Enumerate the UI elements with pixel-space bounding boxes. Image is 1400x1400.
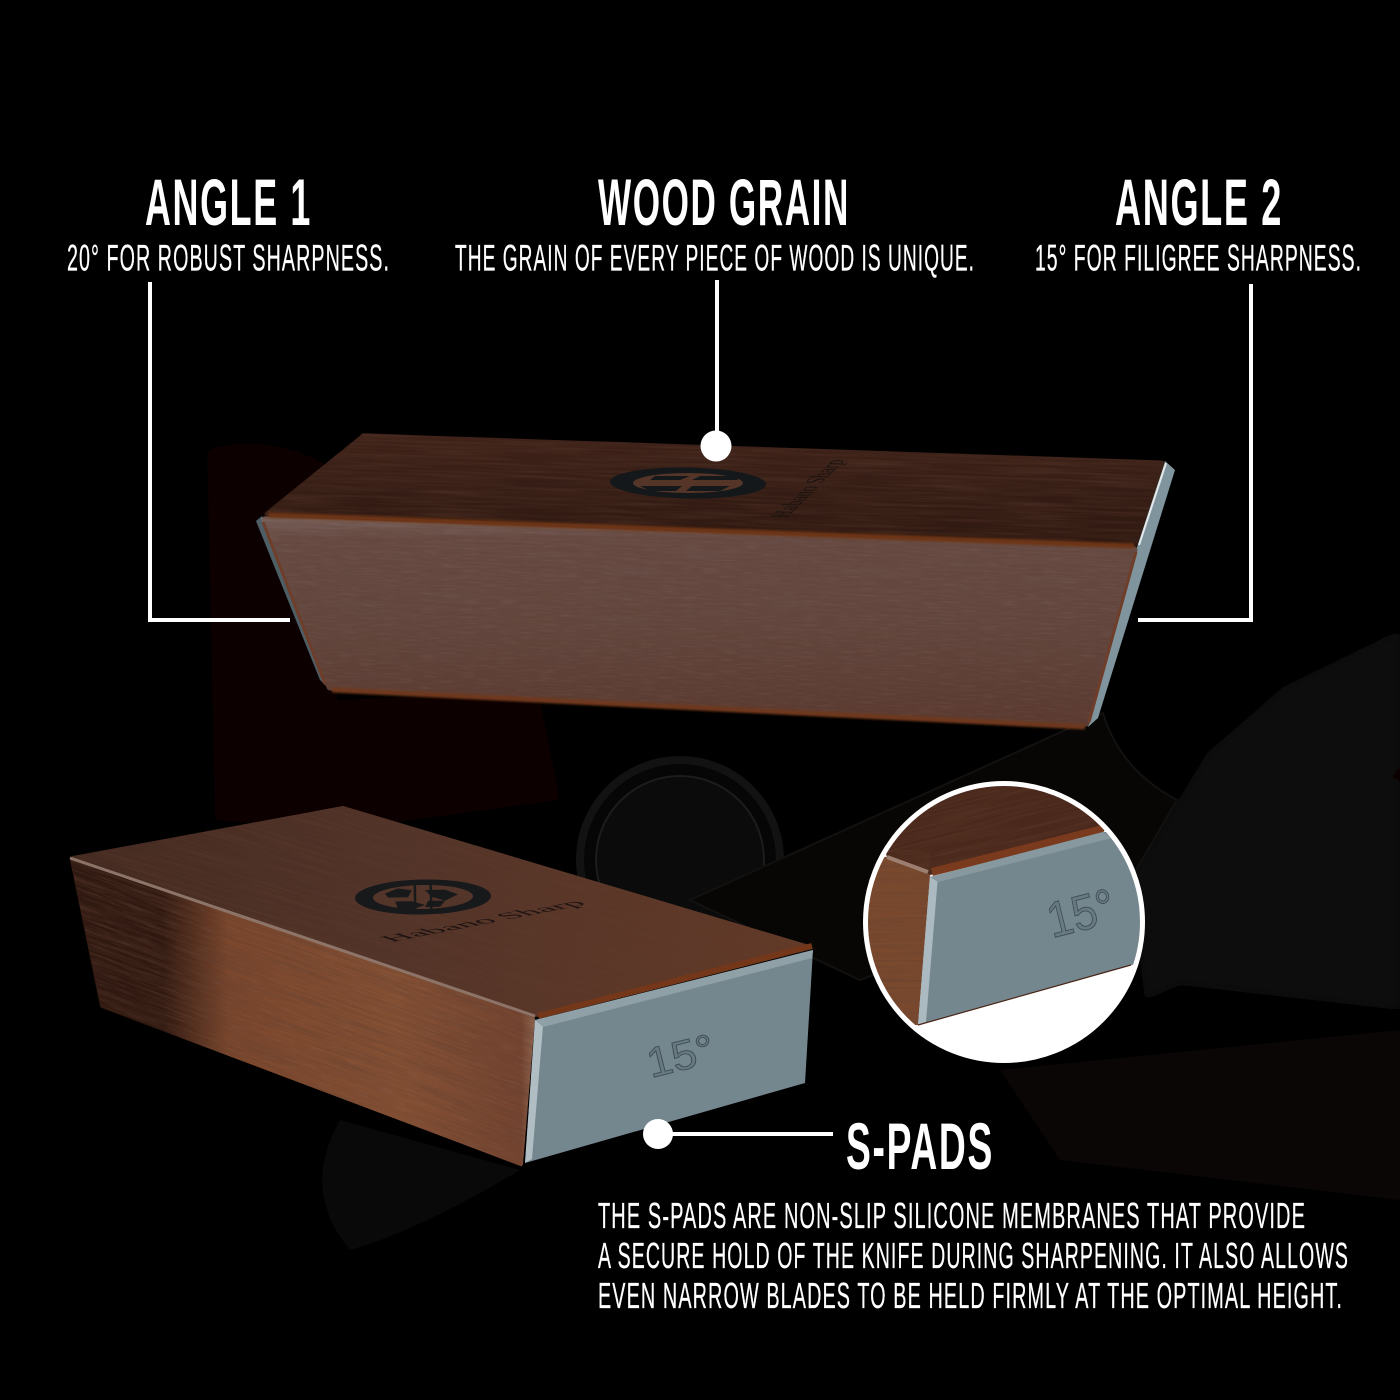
orange top edge	[268, 515, 1134, 546]
heading: WOOD GRAIN	[598, 165, 850, 239]
silver pad face	[525, 950, 813, 1163]
leader line	[660, 1132, 833, 1136]
side edges	[263, 522, 1136, 722]
lens wood edge	[932, 829, 1103, 872]
silver pad bevel	[525, 1020, 543, 1163]
lens engraved 15 degree mark: 15°	[1041, 878, 1121, 949]
lens ring	[866, 784, 1142, 1060]
lens wood top	[886, 786, 1104, 875]
callout: angle 1	[67, 165, 390, 620]
leader dot	[700, 430, 732, 462]
description: 20° FOR ROBUST SHARPNESS.	[67, 238, 390, 278]
faint background: right hand	[1130, 630, 1400, 1010]
lens silver top bevel	[930, 832, 1112, 882]
panel: lower sharpening block	[70, 806, 813, 1167]
orange bottom edge	[332, 690, 1085, 727]
right silver pad edge	[1088, 461, 1175, 727]
heading: S-PADS	[846, 1109, 994, 1183]
silver pad top bevel	[535, 950, 813, 1027]
heading: ANGLE 1	[145, 165, 312, 239]
top wood face	[73, 808, 809, 1015]
leader line	[1138, 284, 1251, 620]
callout: wood grain	[455, 165, 975, 462]
lens wood side	[868, 857, 930, 1025]
top edge highlight	[70, 858, 535, 1016]
lens silver bevel	[918, 876, 938, 1025]
left silver pad edge	[256, 516, 328, 688]
description	[598, 1195, 1349, 1316]
panel: magnifier circle	[863, 781, 1145, 1063]
front wood face	[265, 520, 1134, 723]
panel: upper sharpening block	[256, 433, 1175, 731]
top wood face	[267, 436, 1162, 544]
faint background: left hand	[207, 443, 560, 830]
leader dot	[643, 1119, 673, 1149]
faint background: sharpening disc, blade and knife block	[322, 713, 1400, 1250]
brand text on lower block: Habano Sharp	[372, 898, 593, 943]
lens corner highlight	[887, 857, 928, 872]
lens silver face	[918, 832, 1150, 1025]
engraved 15 degree mark: 15°	[642, 1025, 719, 1087]
logo on lower block	[355, 878, 491, 916]
brand text on upper block: Habano Sharp	[766, 459, 851, 518]
orange front edge	[538, 946, 812, 1016]
callout: angle 2	[1035, 165, 1362, 620]
logo on upper block	[610, 466, 766, 500]
side wood face	[72, 860, 533, 1164]
leader line	[150, 282, 290, 620]
leader line	[715, 280, 719, 435]
callout: s-pads	[598, 1109, 1349, 1316]
lens white area	[918, 1024, 930, 1030]
